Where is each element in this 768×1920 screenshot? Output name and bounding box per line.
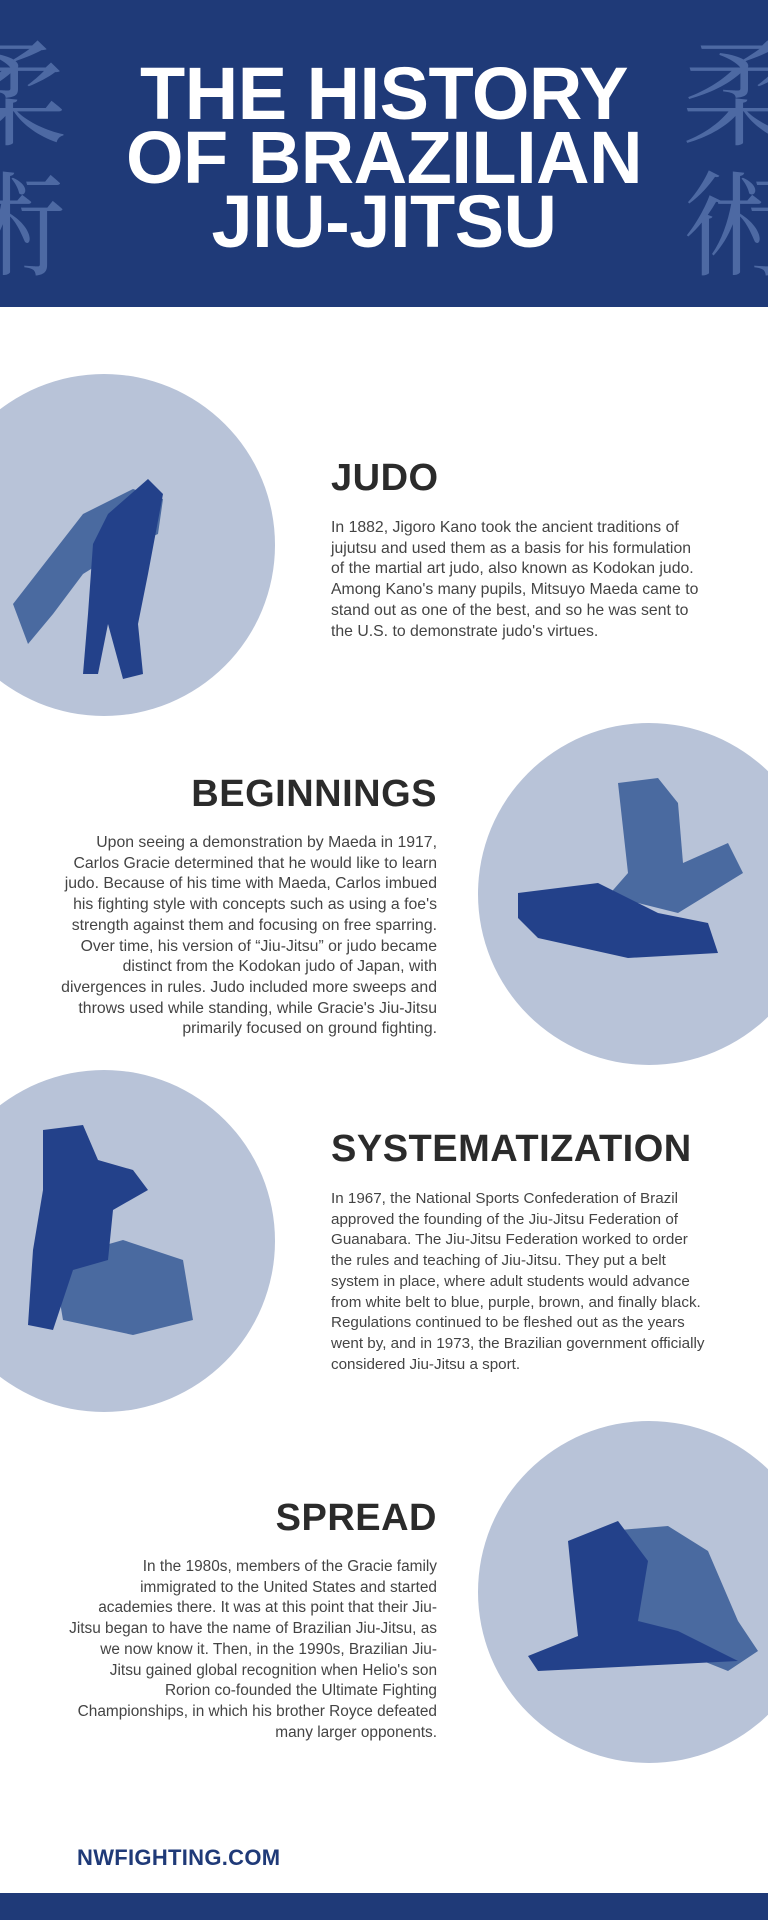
text: systematization: the rules and teaching of Jiu-Jitsu. They put a belt — [331, 1252, 666, 1269]
text: beginnings — [61, 834, 437, 1037]
circle: beginnings illustration — [478, 723, 768, 1065]
text: systematization: Regulations continued to be fleshed out as the years — [331, 1314, 685, 1331]
heading: JUDO: JUDO — [331, 457, 439, 499]
text: judo: Among Kano's many pupils, Mitsuyo Maeda came to — [331, 581, 698, 598]
text: systematization: went by, and in 1973, the Brazilian government officially — [331, 1335, 704, 1352]
text: spread: many larger opponents. — [275, 1724, 437, 1741]
text: systematization: approved the founding of the Jiu-Jitsu Federation of — [331, 1211, 678, 1228]
panel: judo — [0, 374, 698, 716]
text: spread: we now know it. Then, in the 1990s, Brazilian Jiu- — [100, 1641, 437, 1658]
text: systematization: Guanabara. The Jiu-Jitsu Federation worked to order — [331, 1231, 688, 1248]
text: systematization: from white belt to blue, purple, brown, and finally black. — [331, 1294, 701, 1311]
text: beginnings: throws used while standing, while Gracie's Jiu-Jitsu — [78, 1000, 437, 1017]
heading: SPREAD: SPREAD — [276, 1497, 437, 1539]
panel: systematization — [0, 1070, 704, 1412]
text: systematization: considered Jiu-Jitsu a sport. — [331, 1356, 520, 1373]
title — [126, 52, 642, 263]
text: judo: the U.S. to demonstrate judo's virtues. — [331, 623, 598, 640]
title: OF BRAZILIAN — [126, 116, 642, 199]
kanji watermark right — [682, 4, 768, 299]
text: beginnings: strength against them and focusing on free sparring. — [72, 917, 437, 934]
kanji watermark left — [0, 4, 67, 299]
text: spread: Jitsu gained global recognition when Helio's son — [110, 1662, 437, 1679]
text: spread: Championships, in which his brother Royce defeated — [78, 1703, 437, 1720]
text: judo: jujutsu and used them as a basis for his formulation — [331, 540, 691, 557]
text: systematization: system in place, where adult students would advance — [331, 1273, 690, 1290]
footer bar — [0, 1893, 768, 1920]
panel: spread — [69, 1421, 768, 1763]
text: spread — [69, 1558, 437, 1741]
text: beginnings: Over time, his version of “Jiu-Jitsu” or judo became — [81, 938, 437, 955]
text: beginnings: Carlos Gracie determined that he would like to learn — [73, 855, 437, 872]
heading: SYSTEMATIZATION: SYSTEMATIZATION — [331, 1128, 692, 1170]
text: judo: stand out as one of the best, and so he was sent to — [331, 602, 688, 619]
text: beginnings: distinct from the Kodokan judo of Japan, with — [123, 958, 437, 975]
text: systematization: In 1967, the National Sports Confederation of Brazil — [331, 1190, 678, 1207]
text: beginnings: divergences in rules. Judo included more sweeps and — [61, 979, 437, 996]
text: beginnings: his fighting style with concepts such as using a foe's — [73, 896, 437, 913]
circle: spread illustration — [478, 1421, 768, 1763]
panel: beginnings — [61, 723, 768, 1065]
text: judo: In 1882, Jigoro Kano took the ancient traditions of — [331, 519, 679, 536]
header banner — [0, 0, 768, 307]
footer url: NWFIGHTING.COM — [77, 1845, 280, 1870]
circle: judo illustration — [0, 374, 275, 716]
text: spread: In the 1980s, members of the Gracie family — [143, 1558, 437, 1575]
text: beginnings: Upon seeing a demonstration by Maeda in 1917, — [96, 834, 437, 851]
text: spread: immigrated to the United States and started — [140, 1579, 437, 1596]
circle: systematization illustration — [0, 1070, 275, 1412]
text: spread: Jitsu began to have the name of Brazilian Jiu-Jitsu, as — [69, 1620, 437, 1637]
title: THE HISTORY — [140, 52, 628, 135]
text: beginnings: judo. Because of his time with Maeda, Carlos imbued — [65, 875, 437, 892]
heading: BEGINNINGS: BEGINNINGS — [191, 773, 437, 815]
text: judo — [330, 519, 698, 640]
text: spread: academies there. It was at this point that their Jiu- — [98, 1599, 437, 1616]
title: JIU-JITSU — [211, 180, 556, 263]
text: spread: Rorion co-founded the Ultimate Fighting — [165, 1682, 437, 1699]
text: judo: of the martial art judo, also known as Kodokan judo. — [331, 560, 694, 577]
text: beginnings: primarily focused on ground fighting. — [182, 1020, 437, 1037]
text: systematization — [331, 1190, 704, 1373]
